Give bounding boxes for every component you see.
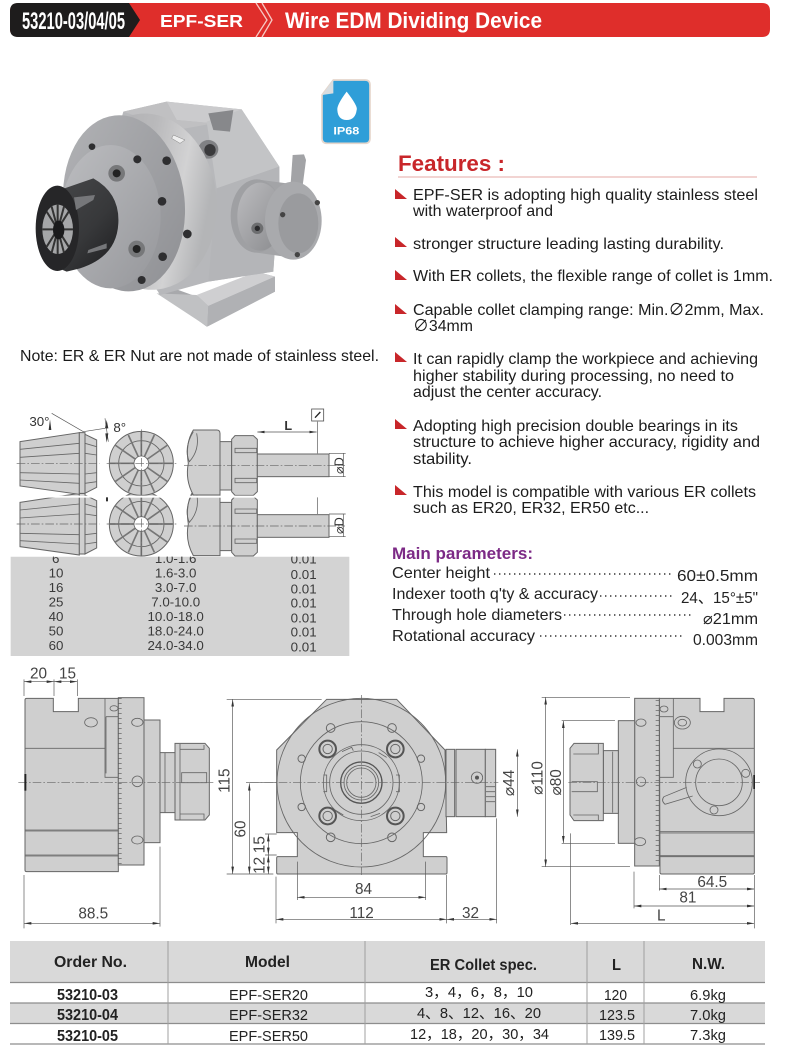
dimensions: 12 and 15: 12 [252, 857, 269, 874]
collet capacity table: 10.0-18.0 [148, 609, 204, 624]
side knob [446, 749, 496, 817]
feature 5 [395, 351, 758, 401]
feature 5: adjust the center accuracy. [413, 384, 602, 401]
parameter: center height [392, 565, 758, 585]
dimensions: 20 and 15: 15 [59, 665, 76, 682]
D dimensions: ⌀D [333, 517, 347, 534]
features list [395, 187, 773, 517]
dimension: diameter 44 [501, 749, 518, 817]
dimension: 115 [216, 699, 322, 874]
table header: N.W. [692, 956, 725, 973]
angle annotations [29, 413, 126, 443]
row 53210-03: 120 [604, 987, 627, 1004]
badge label: IP68 [333, 126, 359, 138]
row 53210-04: 53210-04 [57, 1007, 118, 1024]
feature 6: structure to achieve higher accuracy, rigidity and [413, 434, 760, 451]
row 53210-05: 139.5 [599, 1027, 635, 1044]
order table [10, 941, 765, 1045]
table header: Model [245, 954, 290, 971]
collet capacity table: 7.0-10.0 [151, 594, 200, 609]
body block [100, 102, 279, 295]
row 53210-05: 7.3kg [690, 1027, 726, 1044]
feature 6: Adopting high precision double bearings in its [413, 418, 738, 435]
feature 5: It can rapidly clamp the workpiece and achieving [413, 351, 758, 368]
header banner [10, 3, 770, 37]
dimensions: 12 and 15: 15 [252, 836, 269, 853]
table header: L [612, 957, 621, 974]
collet capacity table: 50 [49, 623, 63, 638]
collet capacity table: 1.6-3.0 [155, 566, 196, 581]
feature 6: stability. [413, 451, 472, 468]
dimensions: 20 and 15: 20 [30, 665, 47, 682]
dimension: diameter 110: ⌀110 [530, 761, 547, 795]
feature 2: stronger structure leading lasting durability. [413, 236, 724, 253]
collet capacity table [11, 551, 349, 656]
flange [54, 109, 194, 298]
dimension: 60 [232, 783, 277, 874]
product photo [36, 102, 322, 327]
row 53210-04: EPF-SER32 [229, 1007, 308, 1024]
dimension: 84 [297, 862, 426, 900]
row 53210-04: 4、8、12、16、20 [417, 1005, 541, 1022]
parameter: indexer tooth: 24、15°±5" [681, 590, 758, 607]
table header: ER Collet spec. [430, 957, 537, 974]
row 53210-05 [57, 1026, 726, 1045]
angle annotations: 30° [29, 414, 49, 429]
dimension: diameter 44: ⌀44 [501, 769, 518, 796]
collet capacity table: 25 [49, 594, 63, 609]
table shading [10, 941, 765, 1044]
row 53210-03: 53210-03 [57, 987, 118, 1004]
dimension: diameter 110 [530, 697, 630, 867]
order number tag: 53210-03/04/05 [22, 8, 125, 35]
collet capacity table: 10 [49, 566, 63, 581]
dimension: 81: 81 [679, 890, 696, 907]
upper collet row [17, 429, 345, 497]
row 53210-05: EPF-SER50 [229, 1028, 308, 1045]
parameter: indexer tooth: Indexer tooth q'ty & accuracy [392, 586, 598, 603]
dimension: 88.5 [24, 847, 160, 928]
dimension: 64.5 [659, 874, 754, 928]
side knob with handle [290, 154, 306, 193]
collet capacity table: 0.01 [291, 552, 317, 567]
dimension: 112 [276, 875, 447, 923]
feature 1: EPF-SER is adopting high quality stainless steel [413, 187, 758, 204]
order number tag [10, 3, 140, 37]
collet capacity table: 16 [49, 580, 63, 595]
parameter: indexer tooth [392, 586, 758, 607]
features heading: Features : [398, 151, 505, 176]
collet nut [36, 178, 118, 272]
collet capacity table: 24.0-34.0 [148, 638, 204, 653]
row 53210-03: 3，4，6，8，10 [425, 984, 533, 1001]
stainless steel note: Note: ER & ER Nut are not made of stainless steel. [20, 348, 379, 365]
collet capacity table: 0.01 [291, 610, 317, 625]
collet and runout diagram [0, 409, 380, 660]
indexing handle [663, 749, 752, 816]
dimension: L: L [657, 908, 666, 925]
dimension: 32 [447, 818, 497, 923]
dimension: 112: 112 [349, 905, 374, 922]
parameter: through hole: Through hole diameters [392, 607, 562, 624]
dimension: diameter 80: ⌀80 [548, 769, 565, 795]
dimension: diameter 80 [548, 721, 615, 843]
row 53210-04: 7.0kg [690, 1007, 726, 1024]
feature 7: such as ER20, ER32, ER50 etc... [413, 500, 649, 517]
table header [54, 954, 725, 974]
parameter: rotational accuracy [392, 628, 758, 649]
dimension: 60: 60 [232, 820, 249, 838]
collet capacity table: 60 [49, 638, 63, 653]
dimension: 32: 32 [462, 905, 479, 922]
feature 4: ∅34mm [413, 318, 473, 335]
row 53210-03: 6.9kg [690, 987, 726, 1004]
parameters heading: Main parameters: [392, 545, 533, 563]
icon: water drop [337, 92, 357, 120]
L dimension: L [284, 419, 292, 433]
parameter: center height: 60±0.5mm [677, 568, 758, 585]
feature 7: This model is compatible with various ER collets [413, 484, 756, 501]
collet capacity table: 1.0-1.6 [155, 551, 196, 566]
dimensions: 12 and 15 [252, 834, 277, 874]
IP68 badge [322, 80, 370, 143]
front view drawing [216, 695, 498, 923]
row 53210-03: EPF-SER20 [229, 987, 308, 1004]
collet capacity table: 40 [49, 609, 63, 624]
feature 6 [395, 418, 760, 468]
table header: Order No. [54, 954, 127, 971]
main parameters [392, 545, 758, 649]
dimension: 115: 115 [216, 768, 233, 793]
feature 4 [395, 302, 764, 335]
D dimensions [329, 453, 347, 537]
row 53210-04: 123.5 [599, 1007, 635, 1024]
dimension: 64.5: 64.5 [697, 874, 727, 891]
collet capacity table: 0.01 [291, 581, 317, 596]
collet capacity table: 6 [52, 551, 59, 566]
row 53210-04 [57, 1005, 726, 1024]
L dimension [257, 409, 324, 514]
feature 1 [395, 187, 758, 220]
dial band [71, 107, 226, 297]
product title: Wire EDM Dividing Device [285, 8, 542, 33]
dimension: 88.5: 88.5 [78, 905, 108, 922]
rear view drawing [501, 697, 760, 928]
dimensions: 20 and 15 [24, 665, 77, 696]
parameter: rotational accuracy: Rotational accuracy [392, 628, 535, 645]
feature 7 [395, 484, 756, 517]
row 53210-05: 12，18，20，30，34 [410, 1026, 549, 1043]
series name: EPF-SER [160, 11, 243, 31]
chevron [256, 3, 272, 37]
foot [157, 272, 275, 327]
collet capacity table: 0.01 [291, 567, 317, 582]
feature 4: Capable collet clamping range: Min.∅2mm, Max. [413, 302, 764, 319]
angle annotations: 8° [113, 420, 126, 435]
parameter: center height: Center height [392, 565, 491, 582]
row 53210-05: 53210-05 [57, 1028, 118, 1045]
side view drawing [18, 665, 213, 928]
collet capacity table: 0.01 [291, 625, 317, 640]
feature 5: higher stability during processing, no need to [413, 368, 734, 385]
D dimensions: ⌀D [333, 457, 347, 474]
parameter: through hole [392, 607, 758, 628]
parameter: rotational accuracy: 0.003mm [693, 632, 758, 649]
collet capacity table: 18.0-24.0 [148, 623, 204, 638]
collet capacity table: 0.01 [291, 596, 317, 611]
row 53210-03 [57, 984, 726, 1004]
lower collet row [17, 490, 345, 558]
parameter: through hole: ⌀21mm [703, 611, 758, 628]
feature 1: with waterproof and [412, 203, 553, 220]
dimension: 81 [634, 872, 754, 908]
collet capacity table: 0.01 [291, 639, 317, 654]
dimension: 84: 84 [355, 881, 373, 898]
collet capacity table: 3.0-7.0 [155, 580, 196, 595]
feature 3: With ER collets, the flexible range of collet is 1mm. [413, 268, 773, 285]
